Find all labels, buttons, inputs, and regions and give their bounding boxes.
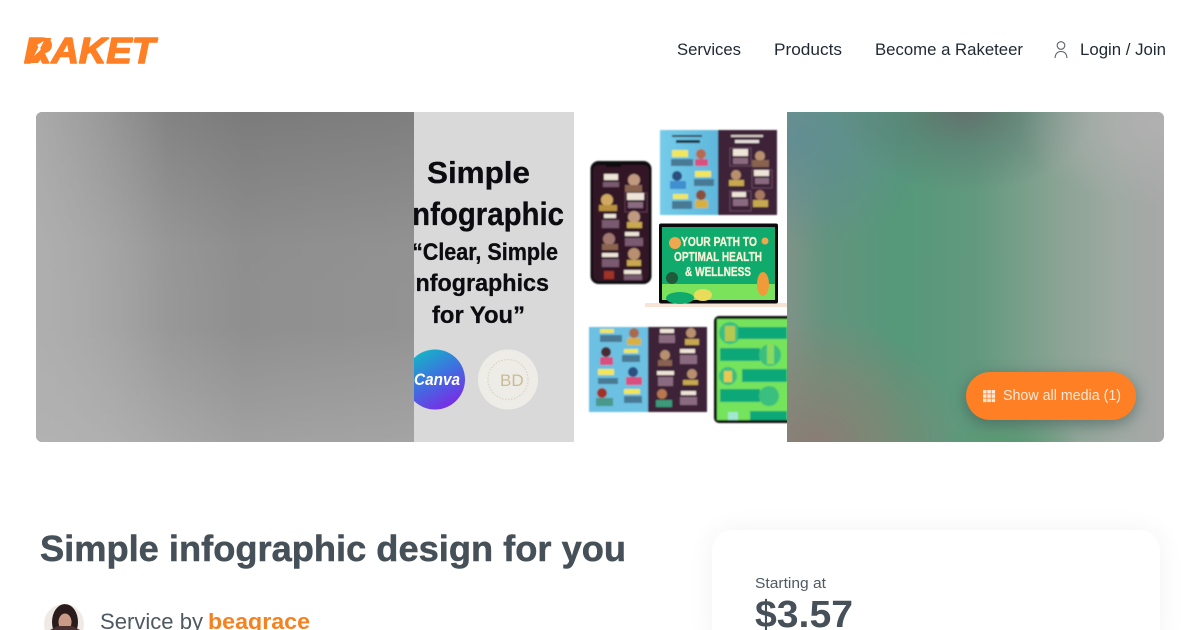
nav: Become a Raketeer: Become a Raketeer [875, 40, 1023, 59]
panel: blurred left backdrop [36, 112, 414, 442]
nav: Services: Services [677, 40, 741, 59]
image headline text: Infographics [409, 270, 549, 297]
mockup: upper brochure [660, 130, 777, 215]
navigation [677, 40, 1166, 59]
image headline text: “Clear, Simple [412, 239, 558, 266]
panel: pricing card [712, 530, 1160, 630]
title: Simple infographic design for you [40, 528, 626, 569]
mockup: laptop [645, 224, 787, 307]
icon: Canva badge: Canva [414, 370, 460, 389]
mockup: lower brochure [589, 327, 707, 412]
mockup: laptop: OPTIMAL HEALTH [674, 250, 762, 264]
icon: Canva badge [414, 350, 465, 410]
button: show all media [966, 372, 1136, 424]
label: starting at: Starting at [755, 575, 827, 592]
nav: Login / Join: Login / Join [1080, 40, 1166, 59]
mockup: tablet [714, 316, 794, 423]
nav: Products: Products [774, 40, 842, 59]
logo: RAKET: RAKET [24, 30, 158, 71]
icon: user [1055, 42, 1067, 58]
button label: Show all media (1) [1003, 388, 1121, 404]
mockup: laptop: YOUR PATH TO [681, 235, 757, 249]
mockup: phone [590, 161, 652, 284]
image headline text [414, 160, 564, 324]
avatar: seller [44, 604, 84, 630]
image headline text: for You” [432, 302, 525, 329]
mockup: laptop: & WELLNESS [685, 265, 751, 279]
image headline text: Simple [427, 155, 530, 190]
icon: BD badge [478, 350, 538, 410]
seller byline [100, 609, 310, 630]
icon: grid [983, 390, 995, 402]
hero media gallery [36, 112, 1164, 442]
panel: blurred right backdrop [787, 112, 1164, 442]
panel: central product image [404, 112, 794, 442]
icon: BD badge: BD [500, 371, 524, 390]
image headline text: Infographic [404, 196, 564, 232]
